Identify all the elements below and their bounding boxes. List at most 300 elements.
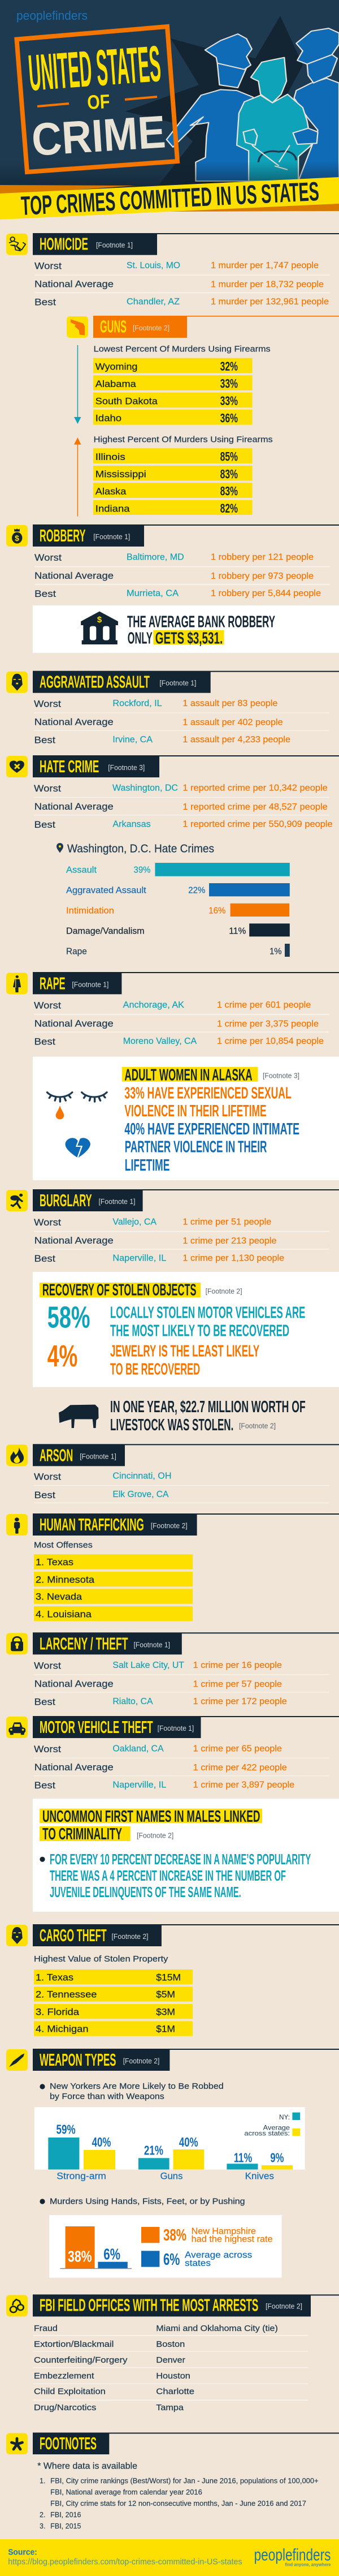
bar: damage/vandalism: Damage/Vandalism — [66, 926, 145, 936]
heading bar: [Footnote 2] — [133, 324, 169, 332]
row: Mississippi: Mississippi — [95, 469, 146, 480]
legend: New Hampshire: New Hampshire — [192, 2226, 256, 2236]
tape shadow left — [0, 185, 136, 195]
row: worst: Worst — [34, 1000, 61, 1010]
row: best — [34, 1696, 287, 1707]
text: jewelry — [110, 1342, 259, 1378]
row: Idaho: Idaho — [95, 413, 121, 424]
bar: damage/vandalism — [66, 923, 290, 936]
row: national average — [34, 801, 328, 812]
row: national average: National Average — [34, 279, 114, 290]
row: Illinois: 85% — [220, 450, 238, 464]
row: best: Naperville, IL — [112, 1780, 166, 1790]
row: worst: Worst — [34, 552, 62, 563]
row: child exploitation — [34, 2387, 194, 2397]
section: arson — [6, 1444, 339, 1503]
row: worst: Washington, DC — [112, 783, 178, 793]
icon: heart with x — [6, 756, 28, 777]
bar: New Hampshire: 38% — [68, 2248, 92, 2265]
row: best: 1 murder per 132,961 people — [211, 297, 329, 307]
row: national average: National Average — [34, 1018, 114, 1029]
heading: New Yorkers: New Yorkers Are More Likely to Be Robbed — [50, 2082, 224, 2091]
row: extortion — [34, 2340, 185, 2349]
bar: intimidation — [66, 904, 289, 917]
row: worst: Baltimore, MD — [127, 552, 184, 562]
section: aggravated assault — [6, 671, 339, 746]
row: Wyoming: 32% — [220, 359, 238, 373]
icon: cow — [59, 1405, 99, 1428]
bar group: strong-arm — [48, 2122, 115, 2182]
heading bar: [Footnote 1] — [158, 1724, 194, 1732]
title frame — [17, 27, 177, 172]
row: worst — [34, 783, 328, 794]
heading bar: FOOTNOTES — [40, 2434, 97, 2453]
legend: New Hampshire — [141, 2226, 273, 2244]
legend: New Hampshire: 38% — [163, 2226, 186, 2244]
row: worst: 1 reported crime per 10,342 people — [182, 783, 328, 793]
illustration: dark burst behind figures — [125, 16, 303, 185]
row: Mississippi: 83% — [220, 467, 238, 481]
heading bar — [33, 1444, 125, 1466]
callout: stolen livestock — [59, 1398, 306, 1434]
text: average bank robbery: GETS $3,531. — [155, 629, 223, 647]
heading: New Yorkers: by Force than with Weapons — [50, 2092, 164, 2101]
row: worst: Worst — [34, 1660, 61, 1671]
footnote list: 1. — [40, 2477, 45, 2485]
bar chart: Washington D.C. hate crimes — [56, 843, 290, 957]
title: of: OF — [86, 91, 110, 114]
row: best: Naperville, IL — [112, 1254, 166, 1263]
row: best: Murrieta, CA — [127, 588, 179, 599]
row: Nevada: 3. Nevada — [36, 1592, 82, 1602]
row: Florida: $3M — [156, 2006, 175, 2017]
row: worst: Rockford, IL — [112, 699, 162, 708]
row: Alabama — [93, 375, 252, 391]
heading bar: ROBBERY — [40, 526, 86, 545]
text: livestock: LIVESTOCK WAS STOLEN. — [110, 1416, 233, 1434]
panel: uncommon first names — [33, 1799, 339, 1912]
heading bar: [Footnote 1] — [159, 680, 196, 687]
bar group: strong-arm: 40% — [92, 2135, 111, 2149]
bar group: strong-arm: Strong-arm — [56, 2171, 106, 2182]
row: national average — [34, 1235, 277, 1246]
footnote: [Footnote 2] — [137, 1832, 173, 1840]
bar group: guns — [138, 2135, 204, 2182]
heading bar: GUNS — [100, 317, 127, 336]
bar: intimidation: 16% — [208, 906, 225, 915]
row: South Dakota: 33% — [220, 394, 238, 408]
row: best: 1 crime per 1,130 people — [182, 1254, 284, 1263]
panel: murders chart — [49, 2215, 282, 2278]
row: best — [34, 735, 290, 746]
row: counterfeiting — [34, 2355, 185, 2365]
heading bar: LARCENY / THEFT — [40, 1634, 128, 1653]
icon: chalk outline — [6, 234, 28, 255]
bullet — [40, 1857, 45, 1862]
section: robbery — [6, 524, 339, 653]
icon: person — [6, 1514, 28, 1536]
section: human trafficking — [6, 1513, 339, 1621]
row: worst: 1 crime per 51 people — [182, 1218, 271, 1227]
row: best: Moreno Valley, CA — [123, 1037, 197, 1046]
bar group: knives — [227, 2150, 293, 2182]
row: best: Irvine, CA — [112, 735, 153, 745]
row: counterfeiting: Counterfeiting/Forgery — [34, 2355, 128, 2365]
heading bar: [Footnote 2] — [266, 2302, 302, 2310]
heading: murders using hands: Murders Using Hands, Fists, Feet, or by Pushing — [50, 2196, 245, 2206]
callout: bank robbery — [33, 605, 339, 653]
icon: car — [6, 1717, 28, 1738]
row: best: 1 crime per 3,897 people — [193, 1780, 294, 1790]
footnote list: FBI, City crime stats for 12 non-consecutive months, Jan - June 2016 and 2017 — [50, 2500, 306, 2508]
icon: revolver — [67, 316, 88, 338]
row: worst: Worst — [34, 1217, 61, 1228]
row: Wyoming — [93, 358, 252, 373]
legend: average: Average across — [185, 2251, 252, 2260]
row: best — [34, 297, 329, 308]
row: worst — [34, 1000, 311, 1010]
heading bar: HATE CRIME — [40, 757, 99, 776]
row: national average: National Average — [34, 1678, 114, 1689]
tagline: find anyone, anywhere — [285, 2561, 331, 2567]
footnote list: 2. — [40, 2511, 45, 2519]
bar: rape: Rape — [66, 947, 87, 956]
row: fraud: Fraud — [34, 2324, 58, 2333]
footnote list: FBI, City crime rankings (Best/Worst) for Jan - June 2016, populations of 100,000+ — [50, 2477, 319, 2485]
icon: handcuffs — [6, 2295, 28, 2316]
row: best — [34, 819, 333, 830]
bar: rape — [66, 944, 290, 957]
row: best: 1 robbery per 5,844 people — [211, 588, 321, 599]
row: worst — [34, 1744, 282, 1754]
row: best: 1 assault per 4,233 people — [182, 735, 290, 745]
row: worst: Worst — [34, 699, 61, 709]
row: extortion: Extortion/Blackmail — [34, 2340, 114, 2349]
row: worst — [34, 552, 314, 563]
source label: Source: — [8, 2548, 37, 2557]
row: national average: 1 crime per 213 people — [182, 1236, 277, 1246]
heading bar: HOMICIDE — [40, 235, 88, 254]
bar group: knives: 9% — [270, 2150, 284, 2165]
row: child exploitation: Charlotte — [156, 2387, 194, 2397]
rule left — [37, 104, 69, 106]
row: worst: Oakland, CA — [112, 1744, 164, 1754]
legend: NY: — [279, 2113, 290, 2121]
legend: average: 6% — [163, 2251, 180, 2269]
legend: Average — [263, 2124, 290, 2132]
row: Indiana — [93, 500, 252, 515]
row: Alaska: 83% — [220, 484, 238, 498]
row: best — [34, 1780, 294, 1791]
bar: aggravated assault: 22% — [188, 885, 205, 895]
row: Louisiana: 4. Louisiana — [36, 1609, 92, 1619]
icon: mask — [6, 1925, 28, 1946]
rule right — [125, 97, 157, 100]
row: worst: Anchorage, AK — [123, 1000, 184, 1010]
section: guns — [67, 316, 339, 517]
heading bar: [Footnote 3] — [108, 764, 145, 772]
row: Texas — [34, 1554, 193, 1569]
legend: average: states — [185, 2259, 211, 2268]
row: Illinois — [93, 448, 252, 464]
row: embezzlement: Embezzlement — [34, 2371, 94, 2381]
row: worst: 1 assault per 83 people — [182, 699, 278, 708]
row: Michigan: $1M — [156, 2024, 175, 2035]
row: Tennessee: $5M — [156, 1989, 175, 2000]
row: national average — [34, 1018, 319, 1029]
heading bar: [Footnote 2] — [112, 1933, 148, 1941]
row: national average: 1 robbery per 973 people — [211, 571, 314, 581]
heading highlight: RECOVERY OF STOLEN OBJECTS — [42, 1281, 197, 1299]
row: best: 1 reported crime per 550,909 people — [182, 819, 333, 829]
bar: New Hampshire — [66, 2226, 95, 2269]
icon: padlock — [6, 1633, 28, 1654]
row: Alabama: 33% — [220, 377, 238, 391]
note: where data is available: * Where data is available — [37, 2461, 137, 2471]
bar: aggravated assault — [66, 883, 290, 896]
bullet — [40, 2199, 45, 2204]
heading bar — [33, 2433, 109, 2454]
row: worst — [34, 1471, 172, 1482]
text: jewelry: TO BE RECOVERED — [110, 1360, 200, 1378]
row: national average: National Average — [34, 801, 114, 812]
row: national average: National Average — [34, 1762, 114, 1773]
row: best — [34, 1036, 324, 1047]
row: worst: Salt Lake City, UT — [112, 1661, 184, 1670]
stat: 4 percent: 4% — [47, 1339, 77, 1373]
bar group: knives: Knives — [245, 2171, 274, 2182]
section: homicide — [6, 233, 339, 308]
icon: asterisk — [6, 2433, 28, 2454]
row: Idaho: 36% — [220, 411, 238, 425]
section: burglary — [6, 1189, 339, 1434]
heading bar: RAPE — [40, 974, 66, 993]
row: national average: 1 assault per 402 people — [182, 718, 283, 728]
row: drug/narcotics: Drug/Narcotics — [34, 2403, 96, 2412]
row: national average — [34, 1762, 287, 1773]
bar group: strong-arm: 59% — [56, 2122, 76, 2137]
bullet — [40, 2084, 45, 2089]
text: name popularity — [50, 1851, 311, 1900]
row: Michigan — [34, 2021, 193, 2036]
row: worst — [34, 1217, 271, 1228]
row: extortion: Boston — [156, 2340, 185, 2349]
title: crime: CRIME — [30, 106, 167, 166]
row: Indiana: 82% — [220, 501, 238, 515]
row: national average: National Average — [34, 570, 114, 581]
bar: rape: 1% — [270, 947, 282, 956]
row: South Dakota: South Dakota — [95, 395, 158, 406]
row: best: Best — [34, 1696, 55, 1707]
row: best: Best — [34, 735, 55, 746]
text: average bank robbery: ONLY — [128, 629, 153, 647]
bar group: guns: 40% — [179, 2135, 198, 2149]
icon: map pin — [56, 843, 63, 853]
legend: across states: — [244, 2129, 290, 2137]
row: best — [34, 1253, 284, 1264]
row: worst — [34, 1660, 282, 1671]
heading bar: [Footnote 1] — [98, 1198, 136, 1206]
heading bar: [Footnote 2] — [123, 2057, 159, 2065]
bar: damage/vandalism: 11% — [229, 926, 246, 936]
icon: money bag — [6, 525, 28, 547]
stat: 58 percent: 58% — [47, 1301, 90, 1335]
row: best: Best — [34, 819, 55, 830]
row: Minnesota — [34, 1572, 193, 1586]
bar: assault: Assault — [66, 865, 97, 875]
row: Texas — [34, 1969, 193, 1984]
section: hate crime — [6, 755, 339, 957]
row: worst — [34, 261, 319, 272]
row: national average — [34, 717, 283, 728]
footnote: [Footnote 2] — [206, 1288, 242, 1296]
row: worst: Worst — [34, 261, 62, 272]
heading bar: [Footnote 1] — [93, 533, 130, 541]
row: Louisiana — [34, 1606, 193, 1621]
heading: highest value: Highest Value of Stolen Property — [34, 1954, 168, 1964]
section: rape — [6, 972, 339, 1180]
bar: average — [98, 2245, 128, 2269]
bar chart: robbery type NY vs average — [34, 2107, 305, 2182]
heading highlight — [122, 1066, 258, 1084]
section: cargo theft — [6, 1924, 339, 2036]
row: best: Best — [34, 1780, 55, 1791]
row: Texas: 1. Texas — [36, 1972, 73, 1982]
icon: mask — [6, 672, 28, 693]
footnote list: FBI, 2015 — [50, 2522, 81, 2530]
row: Minnesota: 2. Minnesota — [36, 1574, 95, 1585]
bar: average: 6% — [103, 2245, 120, 2263]
section: weapon types — [6, 2049, 339, 2278]
heading: lowest percent: Lowest Percent Of Murders Using Firearms — [94, 344, 271, 354]
text: livestock — [110, 1398, 306, 1434]
heading: most offenses: Most Offenses — [34, 1540, 93, 1550]
row: Mississippi — [93, 466, 252, 481]
row: best: Best — [34, 1036, 55, 1047]
row: worst: 1 crime per 16 people — [193, 1661, 282, 1670]
row: worst: Worst — [34, 783, 61, 794]
row: national average: National Average — [34, 1235, 114, 1246]
icon: burglar — [6, 1190, 28, 1211]
row: child exploitation: Child Exploitation — [34, 2387, 106, 2397]
arrow: up — [74, 437, 81, 517]
row: Alaska: Alaska — [95, 486, 127, 497]
footnote list: 3. — [40, 2522, 45, 2530]
row: embezzlement: Houston — [156, 2371, 190, 2381]
row: worst: Vallejo, CA — [112, 1218, 157, 1227]
footnote list: FBI, National average from calendar year 2016 — [50, 2488, 202, 2496]
bar group: guns: Guns — [160, 2171, 182, 2182]
footnote list — [40, 2477, 319, 2530]
row: Tennessee: 2. Tennessee — [36, 1989, 97, 2000]
row: national average: 1 crime per 57 people — [193, 1679, 282, 1689]
row: drug/narcotics: Tampa — [156, 2403, 184, 2412]
row: fraud: Miami and Oklahoma City (tie) — [156, 2324, 278, 2333]
heading bar — [93, 316, 187, 338]
text: locally stolen vehicles — [110, 1304, 305, 1340]
bar: aggravated assault: Aggravated Assault — [66, 885, 146, 895]
footnote: [Footnote 3] — [263, 1072, 299, 1080]
row: worst — [34, 699, 278, 709]
chart title: Washington, D.C. Hate Crimes — [67, 843, 214, 855]
heading bar — [33, 973, 121, 994]
row: Wyoming: Wyoming — [95, 361, 137, 372]
row: best: Chandler, AZ — [127, 297, 180, 307]
footer — [0, 2539, 339, 2576]
heading bar: ARSON — [40, 1446, 73, 1465]
row: drug/narcotics — [34, 2403, 184, 2412]
row: Alaska — [93, 483, 252, 498]
row: national average: National Average — [34, 717, 114, 728]
icon: crying eyes — [47, 1093, 107, 1119]
text: average bank robbery — [127, 613, 275, 647]
row: best: 1 crime per 10,854 people — [217, 1037, 324, 1046]
bar group: knives: 11% — [234, 2150, 252, 2165]
heading bar: [Footnote 1] — [80, 1452, 116, 1460]
legend: New Hampshire: had the highest rate — [192, 2235, 273, 2244]
footnote list: FBI, 2016 — [50, 2511, 81, 2519]
row: national average: 1 murder per 18,732 people — [211, 280, 324, 290]
section: motor vehicle theft — [6, 1716, 339, 1912]
row: worst: St. Louis, MO — [127, 261, 180, 270]
row: Texas: 1. Texas — [36, 1557, 73, 1568]
bar group: guns: 21% — [144, 2143, 163, 2158]
row: Illinois: Illinois — [95, 451, 125, 462]
row: national average — [34, 570, 314, 581]
heading bar: HUMAN TRAFFICKING — [40, 1515, 144, 1534]
callout: adult women in Alaska — [33, 1057, 339, 1180]
logo: peoplefinders — [16, 8, 88, 23]
source url: https://blog.peoplefinders.com/top-crimes-committed-in-US-states — [8, 2557, 242, 2567]
heading bar: CARGO THEFT — [40, 1926, 107, 1945]
header banner — [0, 0, 339, 221]
row: Florida: 3. Florida — [36, 2006, 80, 2017]
illustration: police officers and handcuffed suspect — [167, 28, 339, 181]
heading bar: [Footnote 1] — [133, 1641, 170, 1649]
row: best — [34, 1490, 169, 1500]
icon: bank: $ — [97, 615, 102, 625]
row: Nevada — [34, 1589, 193, 1604]
caution tape — [0, 177, 339, 220]
heading bar — [33, 234, 157, 255]
row: best: Best — [34, 1253, 55, 1264]
row: Indiana: Indiana — [95, 503, 130, 514]
arrow: down — [74, 345, 81, 424]
row: best: Best — [34, 1490, 55, 1500]
heading highlight: ADULT WOMEN IN ALASKA — [124, 1066, 253, 1084]
row: best: Best — [34, 297, 56, 308]
row: worst: 1 murder per 1,747 people — [211, 261, 319, 270]
icon: broken heart — [66, 1138, 90, 1158]
row: Michigan: 4. Michigan — [36, 2024, 88, 2035]
heading bar — [33, 525, 144, 547]
text: 40 percent: LIFETIME — [125, 1156, 169, 1175]
row: national average: 1 reported crime per 48,527 people — [182, 802, 328, 812]
row: Alabama: Alabama — [95, 379, 136, 389]
section: larceny / theft — [6, 1632, 339, 1707]
bar: intimidation: Intimidation — [66, 906, 114, 915]
section: FBI field offices — [6, 2294, 339, 2412]
legend — [244, 2113, 300, 2137]
row: worst: 1 crime per 601 people — [217, 1000, 311, 1010]
row: Tennessee — [34, 1986, 193, 2002]
row: worst: Cincinnati, OH — [112, 1471, 172, 1481]
row: national average: 1 crime per 422 people — [193, 1763, 287, 1773]
row: best: 1 crime per 172 people — [193, 1697, 287, 1706]
text: 40 percent — [124, 1120, 299, 1175]
heading bar: BURGLARY — [40, 1191, 92, 1210]
icon: flame — [6, 1444, 28, 1466]
